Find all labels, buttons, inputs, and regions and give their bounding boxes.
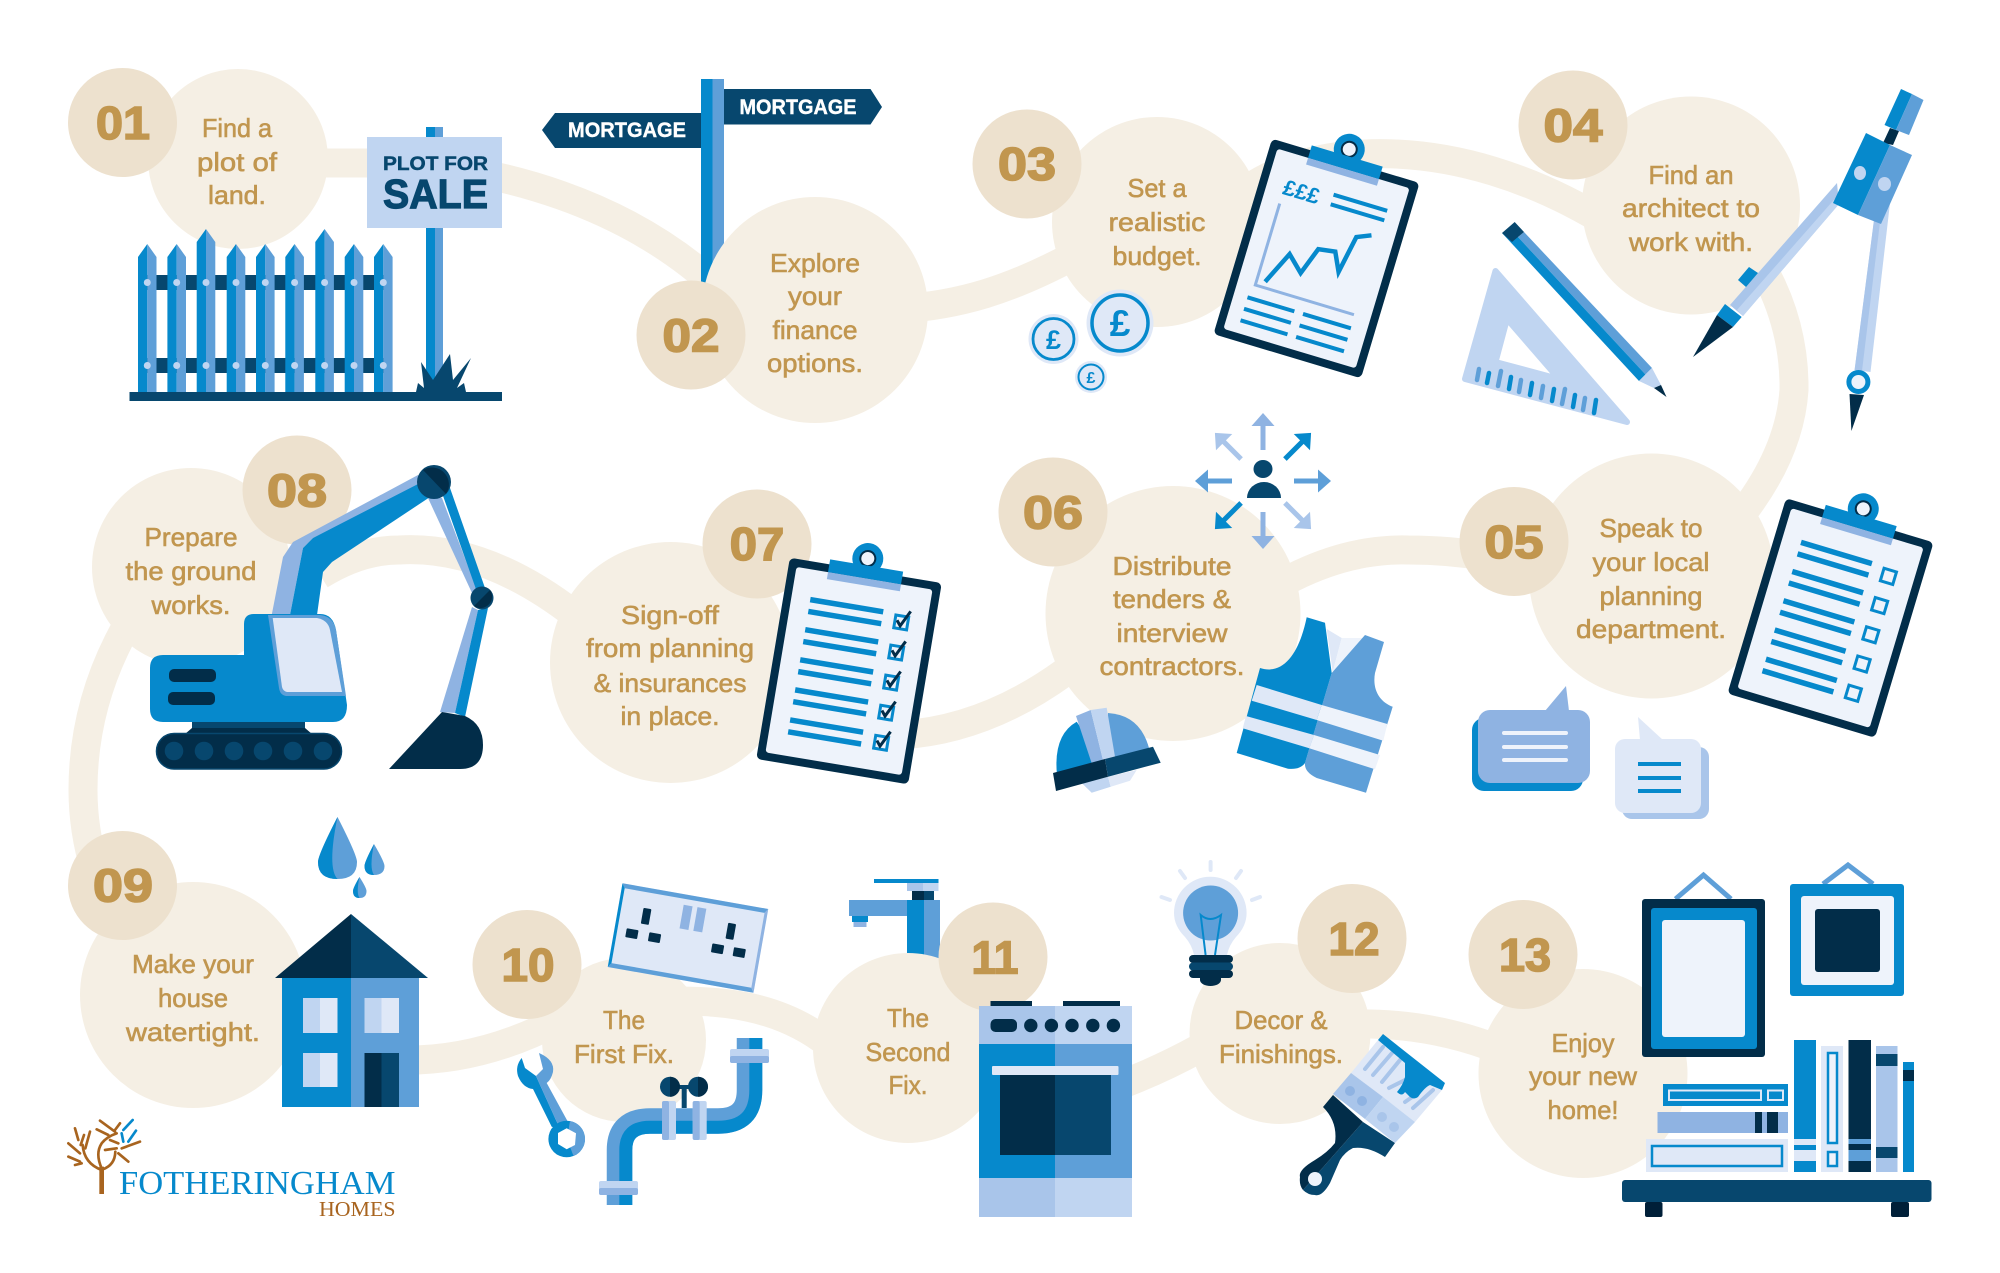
step 04 circles and text: 04: [1544, 100, 1603, 152]
step 02 circles and text: Explore: [770, 248, 860, 278]
route path connecting the steps: [83, 154, 1794, 1085]
logo: Fotheringham Homes: FOTHERINGHAM: [119, 1165, 396, 1202]
step 06 circles and text: Distribute: [1112, 551, 1232, 581]
step 02 circles and text: 02: [662, 310, 720, 362]
icon: clipboard with budget chart: £££: [1280, 175, 1324, 209]
step 09 circles and text: 09: [93, 860, 153, 912]
step 07 circles and text: from planning: [586, 633, 754, 663]
step 08 circles and text: [92, 436, 352, 666]
step 05 circles and text: planning: [1600, 581, 1702, 611]
icon: plot for sale sign and fence: [130, 127, 502, 401]
step 07 circles and text: [550, 490, 812, 783]
step 03 circles and text: budget.: [1112, 241, 1202, 271]
icon: pound coins: £: [1087, 370, 1096, 387]
step 08 circles and text: works.: [150, 590, 230, 620]
icon: pipe with valve: [599, 1038, 769, 1205]
step 01 circles and text: land.: [208, 180, 266, 210]
step 04 circles and text: [1518, 70, 1800, 314]
step 12 circles and text: Finishings.: [1219, 1039, 1343, 1069]
step 03 circles and text: [972, 110, 1262, 327]
icon: picture frames: [1642, 865, 1904, 1057]
step 11 circles and text: [813, 902, 1048, 1143]
icon: speech bubbles: [1472, 686, 1709, 819]
step 12 circles and text: 12: [1328, 913, 1380, 965]
step 09 circles and text: [68, 831, 306, 1108]
step 09 circles and text: watertight.: [125, 1017, 260, 1047]
step 05 circles and text: [1460, 454, 1774, 698]
icon: light bulb: [1162, 862, 1260, 986]
step 13 circles and text: your new: [1529, 1061, 1637, 1091]
icon: oven: [979, 1001, 1132, 1217]
icon: signpost with mortgage signs: [542, 79, 882, 291]
step 13 circles and text: 13: [1499, 929, 1551, 981]
icon: pound coins: £: [1046, 325, 1061, 355]
step 05 circles and text: your local: [1592, 547, 1710, 577]
step 13 circles and text: home!: [1548, 1095, 1618, 1125]
step 11 circles and text: Fix.: [888, 1070, 928, 1100]
step 07 circles and text: in place.: [620, 701, 720, 731]
icon: drawing compass: [1693, 89, 1924, 431]
step 01 circles and text: 01: [96, 97, 150, 149]
step 06 circles and text: 06: [1023, 486, 1083, 538]
step 09 circles and text: Make your: [132, 949, 254, 979]
logo: Fotheringham Homes: [68, 1120, 396, 1221]
step 09 circles and text: house: [158, 983, 228, 1013]
icon: pound coins: [1028, 290, 1154, 393]
icon: clipboard with ticked checklist: [756, 531, 946, 784]
step 07 circles and text: 07: [730, 518, 784, 570]
step 12 circles and text: [1190, 884, 1406, 1124]
step 06 circles and text: [998, 458, 1300, 741]
step 03 circles and text: 03: [998, 138, 1056, 190]
icon: clipboard with budget chart: [1213, 112, 1427, 378]
step 10 circles and text: First Fix.: [574, 1039, 674, 1069]
step 06 circles and text: tenders &: [1113, 584, 1231, 614]
step 08 circles and text: 08: [267, 464, 327, 516]
logo: Fotheringham Homes: HOMES: [319, 1197, 396, 1221]
icon: paint brush: [1300, 1034, 1445, 1195]
step 13 circles and text: [1468, 900, 1688, 1178]
step 05 circles and text: 05: [1484, 516, 1544, 568]
step 13 circles and text: Enjoy: [1552, 1028, 1614, 1058]
icon: hi-vis vest: [1237, 617, 1393, 793]
icon: tap: [849, 879, 940, 960]
icon: plot for sale sign and fence: PLOT FOR: [383, 154, 488, 175]
icon: pound coins: £: [1110, 303, 1131, 344]
icon: clipboard with empty checkboxes: [1727, 472, 1941, 738]
step 08 circles and text: Prepare: [144, 522, 238, 552]
step 07 circles and text: Sign-off: [621, 600, 720, 630]
step 03 circles and text: realistic: [1108, 207, 1206, 237]
icon: signpost with mortgage signs: MORTGAGE: [740, 96, 856, 119]
icon: water drops: [318, 817, 384, 898]
step 05 circles and text: department.: [1576, 614, 1726, 644]
step 08 circles and text: the ground: [126, 556, 256, 586]
icon: wrench: [517, 1053, 585, 1157]
step 03 circles and text: Set a: [1128, 173, 1187, 203]
icon: house: [275, 914, 428, 1107]
step 04 circles and text: architect to: [1622, 193, 1760, 223]
step 06 circles and text: interview: [1116, 618, 1228, 648]
step 02 circles and text: [636, 197, 928, 423]
icon: person with outward arrows: [1195, 413, 1331, 549]
icon: pencil: [1502, 222, 1666, 397]
step 04 circles and text: work with.: [1628, 227, 1753, 257]
icon: plot for sale sign and fence: SALE: [383, 171, 488, 217]
step 02 circles and text: your: [788, 281, 842, 311]
step 07 circles and text: & insurances: [594, 668, 746, 698]
icon: bookshelf with books: [1622, 1040, 1932, 1217]
step 02 circles and text: finance: [772, 315, 858, 345]
icon: hard hat: [1053, 708, 1161, 793]
step 05 circles and text: Speak to: [1600, 513, 1702, 543]
icon: set square: [1465, 271, 1627, 422]
step 06 circles and text: contractors.: [1100, 651, 1244, 681]
step 02 circles and text: options.: [767, 348, 863, 378]
step 10 circles and text: 10: [502, 939, 554, 991]
step 01 circles and text: Find a: [202, 113, 273, 143]
step 10 circles and text: The: [603, 1005, 645, 1035]
step 10 circles and text: [472, 910, 706, 1122]
step 11 circles and text: The: [887, 1003, 929, 1033]
step 01 circles and text: plot of: [197, 147, 278, 177]
step 11 circles and text: Second: [866, 1037, 950, 1067]
icon: excavator: [150, 465, 494, 769]
step 04 circles and text: Find an: [1648, 160, 1734, 190]
step 01 circles and text: [68, 68, 328, 249]
step 12 circles and text: Decor &: [1234, 1005, 1328, 1035]
icon: plug socket: [608, 883, 768, 993]
icon: signpost with mortgage signs: MORTGAGE: [568, 119, 686, 142]
step 11 circles and text: 11: [972, 932, 1018, 984]
